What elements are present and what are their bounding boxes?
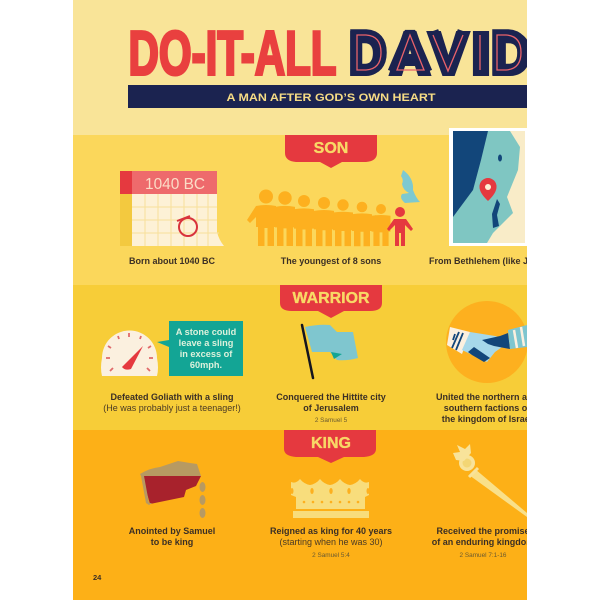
banner: warrior xyxy=(280,285,382,318)
banner: warrior: WARRIOR xyxy=(292,290,370,307)
banner: king: KING xyxy=(311,435,351,452)
callout: stone: 60mph. xyxy=(190,360,222,370)
subtitle bar xyxy=(128,85,527,108)
banner: son xyxy=(285,135,377,168)
text: promise: 2 Samuel 7:1-16 xyxy=(460,552,507,559)
title: david: D xyxy=(350,22,384,86)
text: united: the kingdom of Israel xyxy=(442,414,532,424)
title: david: D xyxy=(492,22,530,86)
icon: eight sons xyxy=(247,190,413,246)
icon: crown xyxy=(290,479,370,518)
text: jerusalem: 2 Samuel 5 xyxy=(315,417,348,424)
text: jerusalem: Conquered the Hittite city xyxy=(276,392,386,402)
text: reigned xyxy=(270,528,392,557)
callout: stone: leave a sling xyxy=(179,338,233,348)
text: jerusalem xyxy=(276,394,386,422)
text: united: United the northern and xyxy=(436,392,538,402)
page number: 24 xyxy=(93,573,102,582)
text: jerusalem: of Jerusalem xyxy=(303,403,359,413)
text: youngest: The youngest of 8 sons xyxy=(281,256,381,266)
map xyxy=(449,128,527,246)
text: promise: of an enduring kingdom xyxy=(432,537,534,547)
text: promise: Received the promise xyxy=(436,526,530,536)
text: anointed: Anointed by Samuel xyxy=(129,526,215,536)
title: david: A xyxy=(391,22,429,86)
text: anointed: to be king xyxy=(151,537,193,547)
title: david: V xyxy=(430,22,467,86)
text: united xyxy=(436,394,527,424)
text: bethlehem: From Bethlehem (like Jesus) xyxy=(429,256,552,266)
subtitle bar: A MAN AFTER GOD’S OWN HEART xyxy=(226,92,436,104)
icon: flag xyxy=(302,325,358,378)
banner: king xyxy=(284,430,376,463)
icon: blue bird xyxy=(401,170,420,203)
title: david xyxy=(350,29,527,76)
panel: header band xyxy=(73,0,527,135)
text: goliath: Defeated Goliath with a sling xyxy=(110,392,234,402)
callout: stone: in excess of xyxy=(180,349,233,359)
icon: calendar: 1040 BC xyxy=(145,176,205,193)
text: anointed xyxy=(129,526,215,547)
icon: calendar xyxy=(120,171,224,246)
title: david: I xyxy=(472,22,490,86)
text: united: southern factions of xyxy=(444,403,531,413)
text: reigned: Reigned as king for 40 years xyxy=(270,526,392,536)
text: promise xyxy=(432,528,527,557)
icon: speedometer xyxy=(101,330,158,376)
text: goliath: (He was probably just a teenager!) xyxy=(103,403,241,413)
panel: warrior xyxy=(73,285,527,430)
callout: stone: A stone could xyxy=(176,327,236,337)
icon: scepter xyxy=(453,444,527,517)
title: do-it-all: DO-IT-ALL xyxy=(128,20,336,89)
text: goliath xyxy=(103,392,241,413)
icon: anointing horn xyxy=(140,461,206,518)
panel: son xyxy=(73,135,527,285)
text: reigned: 2 Samuel 5:4 xyxy=(312,552,350,559)
callout: stone xyxy=(157,321,243,376)
banner: son: SON xyxy=(314,140,348,157)
icon: handshake xyxy=(446,301,528,383)
page xyxy=(73,0,552,600)
text: reigned: (starting when he was 30) xyxy=(279,537,383,547)
text: born: Born about 1040 BC xyxy=(129,256,216,266)
panel: king xyxy=(73,430,527,600)
